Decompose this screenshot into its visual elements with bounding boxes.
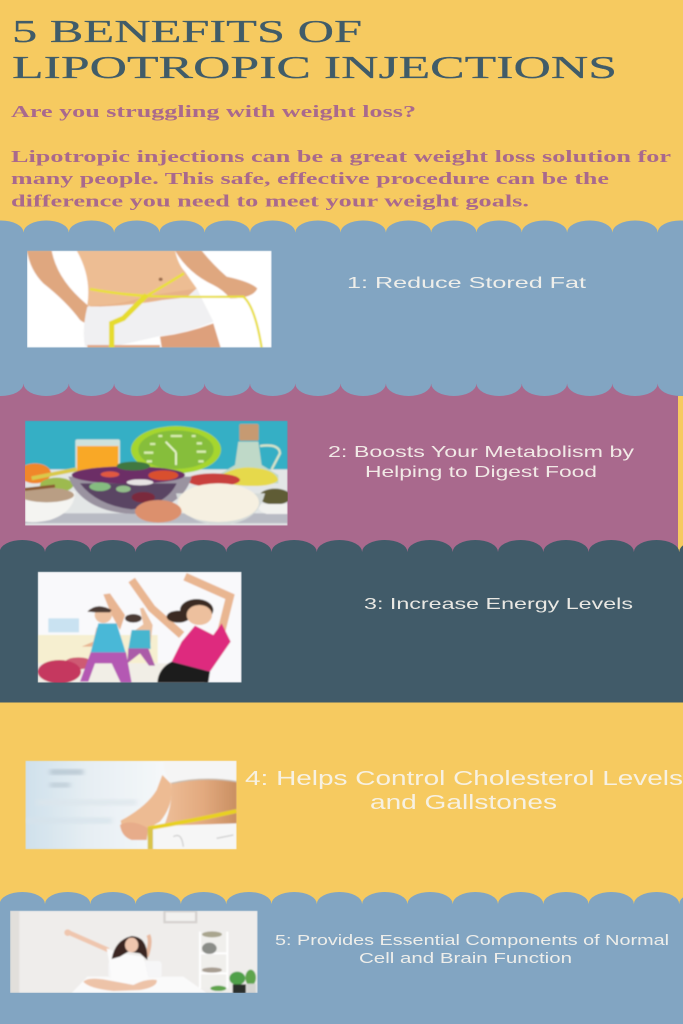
label: benefit 1: 1: Reduce Stored Fat: [347, 275, 587, 292]
label: benefit 4: and Gallstones: [370, 792, 557, 814]
title: [12, 13, 617, 85]
panel: benefit 1 stored fat: [0, 220, 683, 396]
label: benefit 5: Cell and Brain Function: [359, 951, 572, 967]
label: benefit 5: [275, 933, 669, 967]
photo: woman stretching on bed: [10, 911, 258, 993]
label: benefit 5: 5: Provides Essential Components of Normal: [275, 933, 669, 949]
blue scalloped band: [0, 892, 683, 1024]
label: benefit 2: [328, 444, 634, 481]
question subheading: Are you struggling with weight loss?: [11, 102, 416, 121]
dark scalloped band: [0, 540, 683, 702]
panel: benefit 2 metabolism: [0, 380, 683, 552]
photo: waist with measuring tape: [27, 251, 272, 348]
intro paragraph: Lipotropic injections can be a great weight loss solution for: [11, 147, 671, 166]
photo: healthy food and clock: [19, 421, 291, 526]
label: benefit 4: [245, 768, 683, 814]
photo: women exercising: [38, 572, 242, 683]
title: LIPOTROPIC INJECTIONS: [12, 49, 617, 85]
purple band: [0, 380, 683, 552]
panel: benefit 5 cell and brain function: [0, 892, 683, 1024]
header block: [11, 13, 671, 210]
label: benefit 2: 2: Boosts Your Metabolism by: [328, 444, 634, 461]
intro paragraph: many people. This safe, effective procedure can be the: [11, 169, 609, 188]
panel: benefit 4 cholesterol: [25, 761, 683, 849]
label: benefit 2: Helping to Digest Food: [365, 464, 597, 481]
label: benefit 4: 4: Helps Control Cholesterol Levels: [245, 768, 683, 790]
label: benefit 3: 3: Increase Energy Levels: [364, 596, 633, 613]
intro paragraph: [11, 147, 671, 210]
panel: benefit 3 energy: [0, 540, 683, 702]
title: 5 BENEFITS OF: [12, 13, 362, 49]
photo: waist and tape on pale background: [25, 761, 237, 849]
blue scalloped band: [0, 220, 683, 396]
intro paragraph: difference you need to meet your weight goals.: [11, 192, 529, 210]
